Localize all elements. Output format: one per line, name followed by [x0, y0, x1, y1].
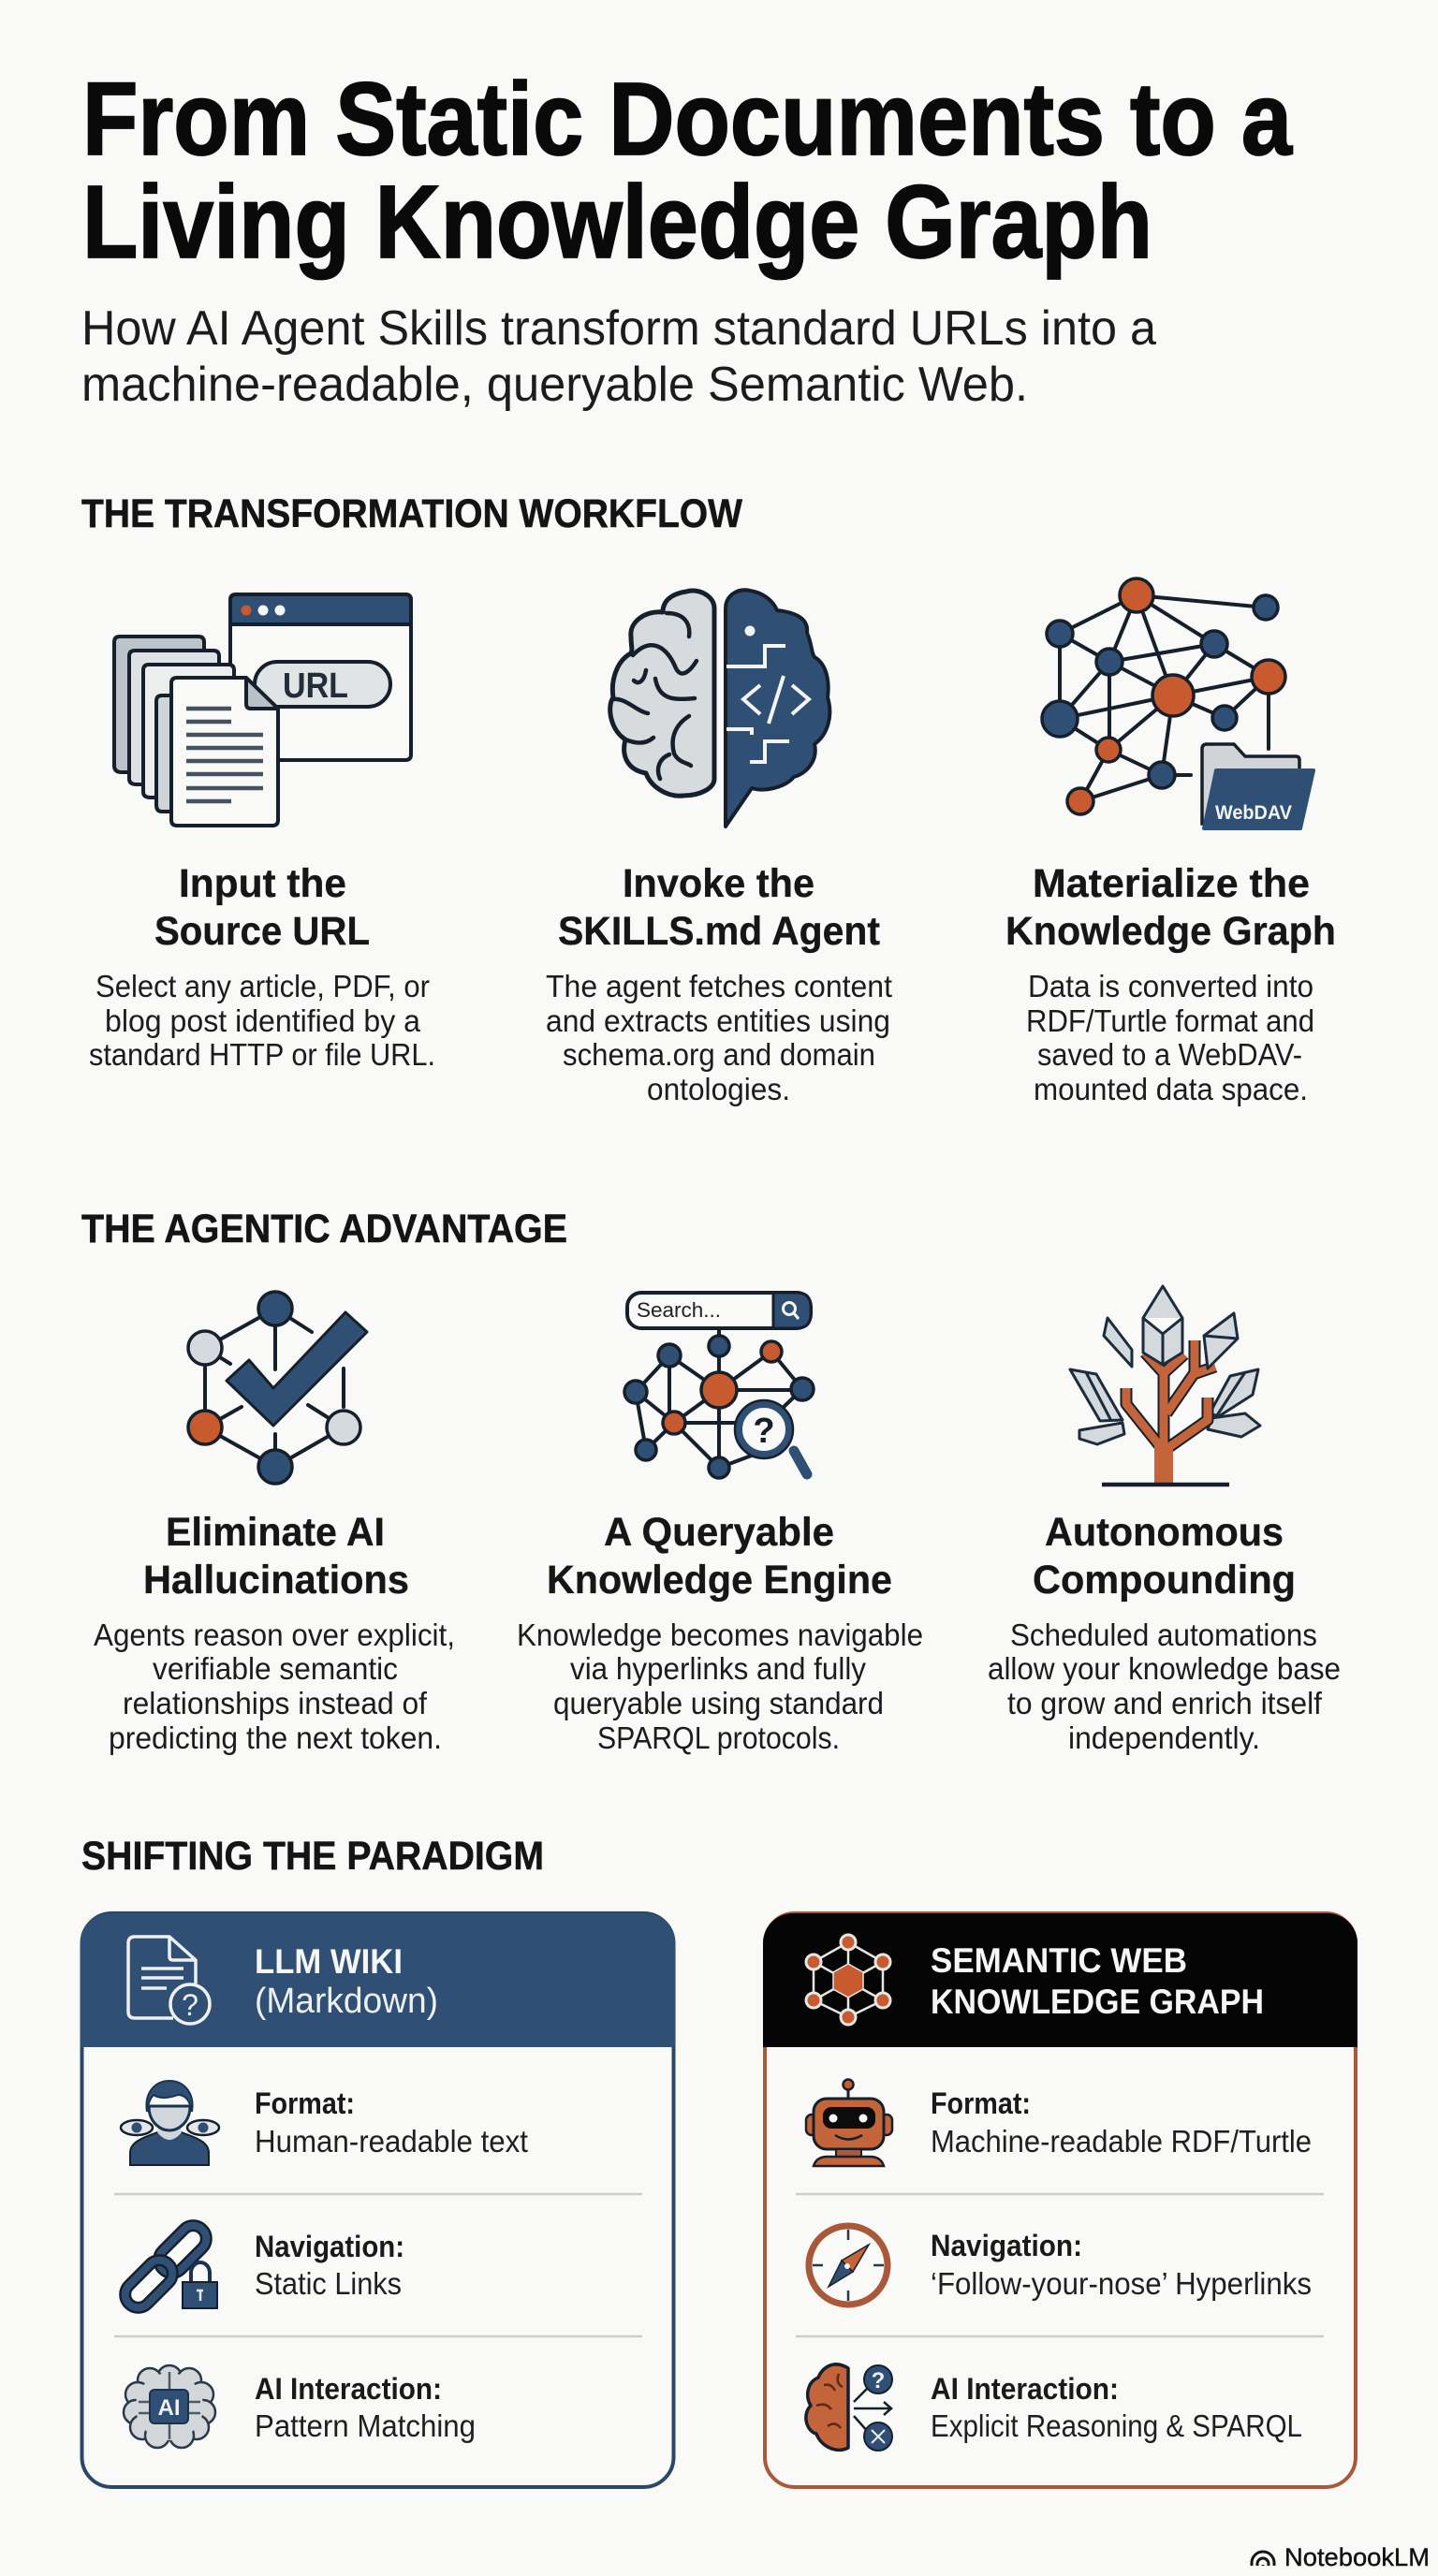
panel header: LLM wiki: [81, 1913, 675, 2047]
step: input the source URL: blog post identified by a: [105, 1003, 421, 1038]
title: Living Knowledge Graph: [82, 165, 1152, 280]
row: navigation static links: Static Links: [255, 2266, 402, 2301]
step: input the source URL: standard HTTP or file URL.: [89, 1037, 435, 1072]
benefit: a queryable knowledge engine: SPARQL protocols.: [597, 1720, 840, 1755]
step: materialize the knowledge graph: RDF/Turtle format and: [1026, 1003, 1314, 1038]
step: invoke the SKILLS.md agent: ontologies.: [647, 1072, 790, 1106]
benefit: eliminate AI hallucinations: Agents reason over explicit,: [94, 1617, 455, 1652]
benefit: eliminate AI hallucinations: Eliminate AI: [166, 1510, 385, 1555]
panel: semantic web knowledge graph: [763, 1913, 1357, 2487]
row: AI interaction explicit reasoning: [806, 2364, 1302, 2451]
title: From Static Documents to a: [82, 62, 1293, 177]
row: AI interaction pattern matching: Pattern Matching: [255, 2408, 476, 2443]
benefit: a queryable knowledge engine: queryable using standard: [553, 1686, 884, 1720]
heading: shifting the paradigm: SHIFTING THE PARADIGM: [81, 1834, 544, 1879]
step: invoke the SKILLS.md agent: SKILLS.md Agent: [558, 909, 880, 954]
benefit: eliminate AI hallucinations: [94, 1510, 455, 1755]
panel header: LLM wiki: (Markdown): [255, 1982, 438, 2021]
icon: half brain half code: [610, 590, 829, 827]
benefit: eliminate AI hallucinations: Hallucinations: [143, 1558, 409, 1603]
step: materialize the knowledge graph: Data is converted into: [1028, 969, 1313, 1003]
benefit: autonomous compounding: Scheduled automations: [1010, 1617, 1317, 1652]
row: navigation follow-your-nose: [808, 2225, 1312, 2305]
step: invoke the SKILLS.md agent: [546, 861, 892, 1106]
heading: the agentic advantage: THE AGENTIC ADVANTAGE: [81, 1207, 567, 1251]
row: AI interaction pattern matching: AI: [157, 2395, 180, 2421]
step: materialize the knowledge graph: Knowledge Graph: [1005, 909, 1336, 954]
icon: search bar over graph with magnifier: [624, 1293, 814, 1478]
benefit: autonomous compounding: allow your knowledge base: [988, 1651, 1341, 1686]
row: navigation static links: [120, 2220, 404, 2313]
row: format machine-readable: Format:: [931, 2086, 1031, 2120]
row: AI interaction explicit reasoning: Explicit Reasoning & SPARQL: [931, 2408, 1302, 2443]
step: input the source URL: Input the: [179, 861, 346, 906]
subtitle: How AI Agent Skills transform standard URLs into a: [81, 301, 1156, 356]
row: AI interaction explicit reasoning: AI Interaction:: [931, 2372, 1119, 2406]
step: materialize the knowledge graph: mounted data space.: [1034, 1072, 1308, 1106]
benefit: eliminate AI hallucinations: relationships instead of: [123, 1686, 428, 1720]
panel: LLM wiki: [81, 1913, 675, 2487]
step: input the source URL: [89, 861, 435, 1072]
icon: documents and URL browser: [114, 594, 411, 826]
row: format human-readable: [121, 2081, 528, 2165]
row: navigation follow-your-nose: Navigation:: [931, 2229, 1082, 2262]
icon: knowledge graph with WebDAV folder: [1042, 578, 1313, 828]
icon: documents and URL browser: URL: [283, 666, 348, 706]
step: input the source URL: Select any article, PDF, or: [95, 969, 430, 1003]
benefit: autonomous compounding: Compounding: [1033, 1558, 1296, 1603]
benefit: a queryable knowledge engine: Knowledge becomes navigable: [517, 1617, 923, 1652]
benefit: a queryable knowledge engine: [517, 1510, 923, 1755]
subtitle: [81, 301, 1156, 412]
panel header: semantic web: [763, 1913, 1357, 2047]
step: input the source URL: Source URL: [154, 909, 370, 954]
title: [82, 62, 1293, 280]
benefit: eliminate AI hallucinations: verifiable semantic: [153, 1651, 398, 1686]
benefit: a queryable knowledge engine: A Queryable: [604, 1510, 834, 1555]
row: AI interaction pattern matching: [124, 2365, 476, 2448]
row: navigation follow-your-nose: ‘Follow-your-nose’ Hyperlinks: [931, 2266, 1312, 2301]
step: materialize the knowledge graph: [1005, 861, 1336, 1106]
icon: verified graph checkmark: [188, 1292, 367, 1484]
row: format human-readable: Human-readable text: [255, 2124, 528, 2159]
step: invoke the SKILLS.md agent: schema.org and domain: [563, 1037, 875, 1072]
row: AI interaction explicit reasoning: ?: [872, 2368, 885, 2393]
benefit: a queryable knowledge engine: Knowledge Engine: [547, 1558, 892, 1603]
step: invoke the SKILLS.md agent: Invoke the: [623, 861, 814, 906]
row: format machine-readable: [806, 2080, 1312, 2166]
row: format human-readable: Format:: [255, 2086, 355, 2120]
benefit: autonomous compounding: [988, 1510, 1341, 1755]
panel header: LLM wiki: LLM WIKI: [255, 1942, 403, 1981]
icon: search bar over graph with magnifier: ?: [753, 1412, 775, 1451]
benefit: eliminate AI hallucinations: predicting the next token.: [109, 1720, 442, 1755]
logo: NotebookLM: NotebookLM: [1284, 2543, 1430, 2571]
icon: search bar over graph with magnifier: Search...: [637, 1298, 721, 1322]
icon: knowledge graph with WebDAV folder: WebDAV: [1215, 802, 1292, 824]
row: navigation static links: Navigation:: [255, 2230, 404, 2263]
heading: the transformation workflow: THE TRANSFORMATION WORKFLOW: [81, 491, 742, 536]
benefit: a queryable knowledge engine: via hyperlinks and fully: [570, 1651, 866, 1686]
icon: crystal tree: [1070, 1286, 1260, 1485]
panel header: LLM wiki: ?: [182, 1988, 198, 2022]
panel header: semantic web: KNOWLEDGE GRAPH: [931, 1983, 1264, 2021]
subtitle: machine-readable, queryable Semantic Web.: [81, 358, 1028, 412]
row: AI interaction pattern matching: AI Interaction:: [255, 2372, 442, 2406]
step: materialize the knowledge graph: Materialize the: [1033, 861, 1310, 906]
row: format machine-readable: Machine-readable RDF/Turtle: [931, 2124, 1312, 2159]
benefit: autonomous compounding: to grow and enrich itself: [1007, 1686, 1323, 1720]
step: invoke the SKILLS.md agent: and extracts entities using: [546, 1003, 890, 1038]
benefit: autonomous compounding: independently.: [1068, 1720, 1260, 1755]
step: invoke the SKILLS.md agent: The agent fetches content: [546, 969, 892, 1003]
panel header: semantic web: SEMANTIC WEB: [931, 1941, 1187, 1980]
benefit: autonomous compounding: Autonomous: [1045, 1510, 1284, 1555]
step: materialize the knowledge graph: saved to a WebDAV-: [1037, 1037, 1302, 1072]
